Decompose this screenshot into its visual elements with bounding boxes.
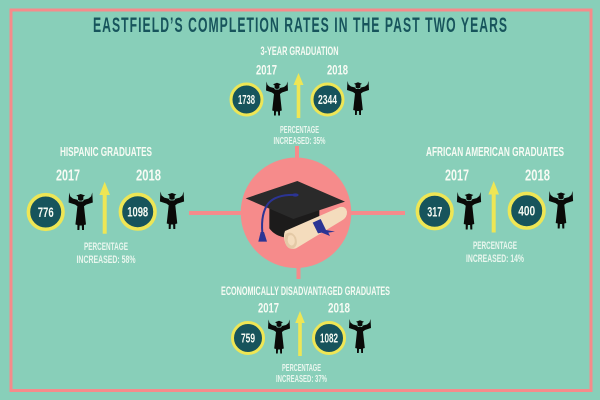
icon: graduate 2018 <box>160 192 184 229</box>
arrow <box>488 181 499 232</box>
icon: graduate 2017 <box>266 82 288 116</box>
central badge: graduation cap and diploma <box>241 158 351 268</box>
year 2017: 2017 <box>256 62 277 78</box>
connector lines <box>189 146 405 279</box>
year 2017: 2017 <box>445 168 469 184</box>
percentage note <box>466 240 524 265</box>
percentage note: PERCENTAGE <box>84 241 128 253</box>
heading: 3-YEAR GRADUATION <box>260 46 338 58</box>
percentage note <box>274 125 326 147</box>
panel: Hispanic graduates <box>28 145 184 266</box>
count 2017: 317 <box>427 203 442 219</box>
count 2018 <box>314 322 344 354</box>
percentage note: INCREASED: 37% <box>276 374 327 385</box>
icon: graduate 2017 <box>69 193 93 230</box>
year 2017: 2017 <box>56 168 80 184</box>
count 2017: 776 <box>38 204 54 220</box>
icon: graduate 2018 <box>347 81 369 115</box>
percentage note <box>76 241 136 266</box>
percentage note: PERCENTAGE <box>282 363 321 374</box>
count 2018: 1082 <box>320 332 338 346</box>
arrow <box>295 311 305 356</box>
year 2018: 2018 <box>136 168 161 184</box>
year 2018: 2018 <box>328 300 350 316</box>
arrow <box>99 182 110 234</box>
count 2018: 400 <box>518 203 535 219</box>
year 2018: 2018 <box>327 62 348 78</box>
count 2017 <box>417 194 452 229</box>
icon: graduate 2018 <box>349 319 371 353</box>
percentage note: INCREASED: 58% <box>76 254 136 266</box>
percentage note <box>276 363 327 385</box>
panel: economically disadvantaged graduates <box>221 286 390 385</box>
percentage note: INCREASED: 14% <box>466 253 524 265</box>
count 2018: 2344 <box>318 93 337 107</box>
count 2017: 759 <box>241 332 255 346</box>
icon: graduate 2017 <box>457 192 481 229</box>
count 2018 <box>120 194 155 229</box>
count 2017: 1738 <box>238 93 255 107</box>
year 2017: 2017 <box>258 300 279 316</box>
year 2018: 2018 <box>525 168 550 184</box>
panel: 3-year graduation <box>231 46 369 147</box>
percentage note: INCREASED: 35% <box>274 136 326 147</box>
icon: graduate 2018 <box>549 191 573 228</box>
heading: ECONOMICALLY DISADVANTAGED GRADUATES <box>221 286 390 298</box>
count 2018: 1098 <box>127 204 148 220</box>
count 2018 <box>509 193 544 228</box>
icon: graduate 2017 <box>268 320 290 354</box>
percentage note: PERCENTAGE <box>280 125 319 136</box>
heading: HISPANIC GRADUATES <box>60 145 152 159</box>
percentage note: PERCENTAGE <box>473 240 517 252</box>
count 2017 <box>232 322 264 354</box>
title: EASTFIELD’S COMPLETION RATES IN THE PAST TWO YEARS <box>93 12 507 37</box>
panel: African American graduates <box>417 145 573 265</box>
count 2017 <box>28 195 63 229</box>
arrow <box>294 73 304 118</box>
